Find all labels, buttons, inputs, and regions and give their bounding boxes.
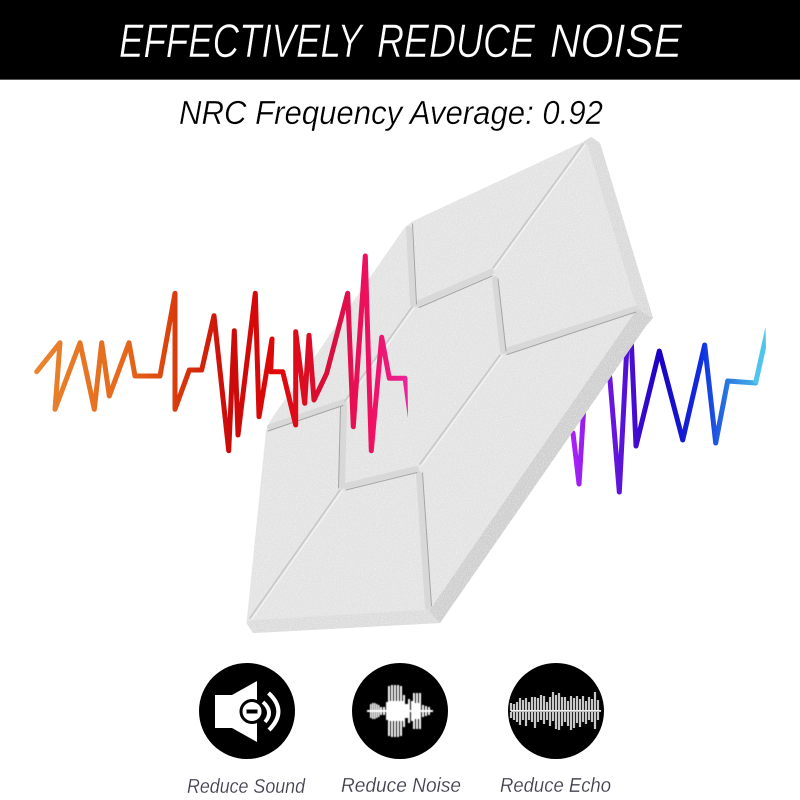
sound wave exiting panel (purple to blue): [573, 327, 766, 492]
panel raised ridges: [250, 144, 636, 619]
icon group: reduce sound: [199, 663, 295, 759]
subtitle: NRC average: NRC Frequency Average: 0.92: [179, 94, 603, 131]
panel thin grooves: [250, 144, 583, 618]
icon group: reduce noise: [352, 663, 448, 759]
title banner: EFFECTIVELY: [119, 14, 365, 67]
acoustic panel: [246, 137, 653, 633]
sound wave entering panel (orange to pink): [37, 256, 408, 451]
panel body: [246, 137, 653, 633]
label: reduce sound: Reduce Sound: [187, 776, 306, 798]
panel edge bevels: [246, 137, 653, 633]
icon group: reduce echo: [508, 663, 604, 759]
title banner: NOISE: [550, 14, 683, 67]
title banner: REDUCE: [377, 14, 536, 67]
title banner: [0, 0, 800, 80]
label: reduce echo: Reduce Echo: [500, 775, 611, 797]
label: reduce noise: Reduce Noise: [341, 775, 461, 797]
